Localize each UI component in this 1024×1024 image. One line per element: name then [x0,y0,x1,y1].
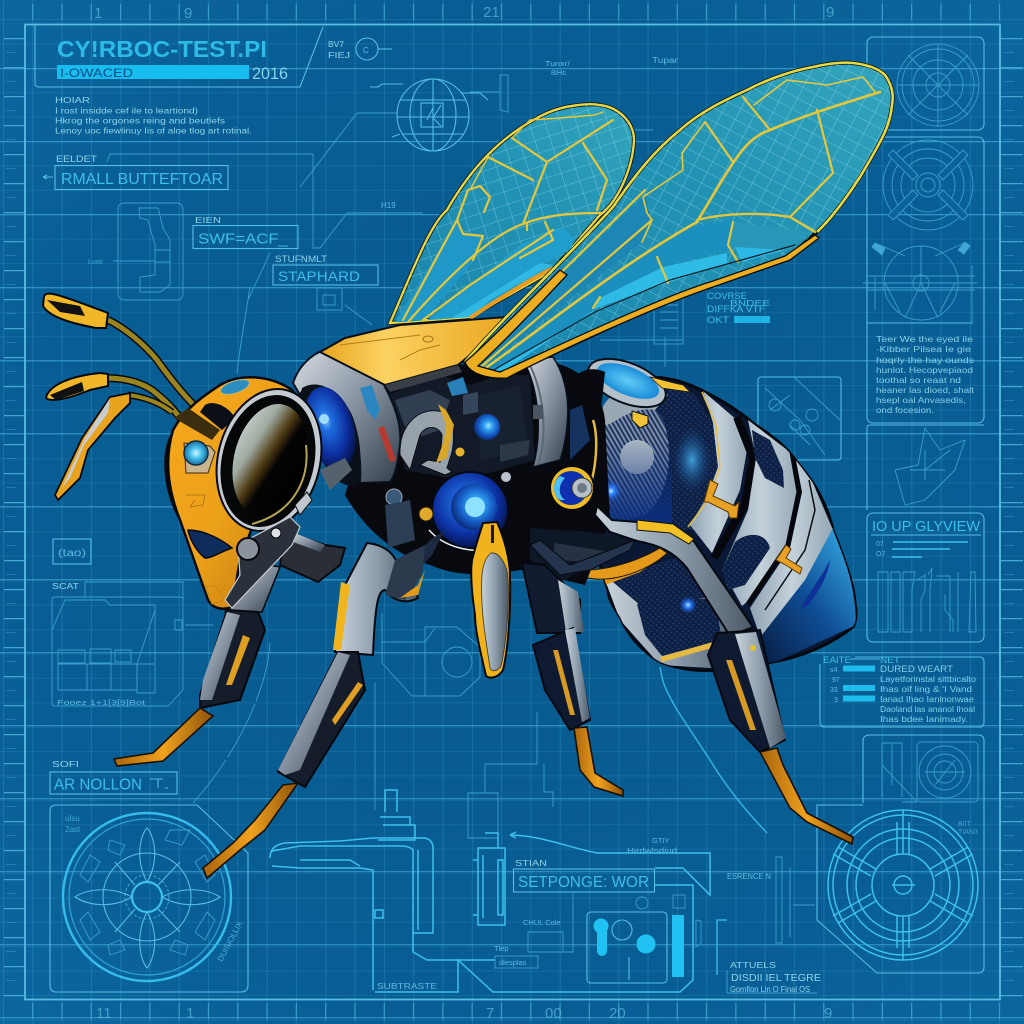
rate bars: 33 [830,687,838,694]
panel note text: toothal so reaat nd [876,375,961,385]
label: air nollon: AR NOLLON [54,776,142,794]
fan rotor diagram: DUISIOLLIX [216,919,245,963]
yellow connector one [704,480,739,518]
covers label and small box: OKT [707,315,729,326]
small blue orb [474,414,500,440]
left foot [114,708,213,766]
right panel: turbine dial [867,37,984,130]
thorax mechanical body [293,317,632,590]
left foreleg lower [200,610,265,708]
rate and note panel [820,655,984,727]
antennae [43,294,220,500]
label: swfacf: EIEN [195,216,221,225]
top labels and dial: C [363,46,369,55]
small tag box: (tao) [58,548,86,559]
lower antenna claw [128,395,172,412]
small turbine schematic [882,742,978,802]
brass bolts and couplers [419,507,433,521]
note text [880,664,977,724]
label: air nollon: SOFI [52,759,79,769]
top labels and dial: 8iHs [551,68,566,77]
label: small butterfoar [43,154,228,190]
centre hexagon schematic [375,613,553,838]
note text: Daoland las ananol Ihoal [880,705,975,714]
intro text block [55,95,252,136]
middle leg [522,563,623,796]
base panels [488,196,650,359]
title panel [35,24,323,87]
panel note text: ond focesion. [876,405,934,415]
panel note text [876,334,975,415]
small device schematic: Lusti [88,259,103,266]
note text: Ianad Ihao Ianinonwae [880,695,975,704]
thin arm [280,532,345,582]
big foot [203,783,298,878]
mouth [188,530,232,558]
ruler numbers [94,4,834,1022]
ruler numbers: 00 [545,1005,562,1022]
silver band three [750,455,833,642]
label: swfacf [193,216,298,248]
jaw mechanism [225,517,300,608]
attributes text and scale: ESRENCE N [727,872,771,881]
small tag box [53,539,91,564]
panel note text: ·Kibber Pilsea Ie gie [876,344,971,354]
top labels and dial [328,38,678,210]
attributes text and scale: ATTUELS [730,960,776,970]
attributes text and scale: DISDII IEL TEGRE [731,973,821,984]
label: staphard: STUFNMLT [275,254,328,264]
bottom right turbine panel [817,735,984,973]
small armour piece [320,458,352,490]
wiring box [758,377,841,460]
bottom left turbine panel: ulsu [65,814,80,823]
ruler numbers: 9 [824,1005,832,1022]
front wing [460,60,900,380]
small device schematic [88,203,183,300]
panel note text: heaner las dioed, shalt [876,385,975,395]
note text: Layetforinstal sittbicalto [880,675,977,684]
face marks [186,495,205,507]
note text: Ihas oif ling & 'I Vand [880,685,972,694]
rear leg [530,506,853,844]
rate bars: 97 [832,677,840,684]
big foreleg lower [278,652,365,787]
label: air nollon [50,759,177,794]
ruler numbers: 1 [94,5,102,22]
rear lower leg [708,630,785,752]
panel note text: hsepl oal Anvasedis, [876,395,966,405]
right panel: fan and specification [863,137,984,423]
bottom right turbine panel: BIIT [958,821,972,828]
machine diagram [863,242,977,322]
antenna sockets [200,403,235,430]
top labels and dial: BV7 [328,39,344,49]
rear wing cyan base cells [395,222,483,322]
pipe and valve labels: SUBTRASTE [377,981,437,991]
ruler numbers: 11 [96,1005,112,1022]
rear wing lower orange edge [470,268,553,318]
rear wing veins [403,112,613,322]
flower icon panel [867,425,984,510]
setup panel: STIAN [515,858,547,868]
setup panel [514,858,701,983]
collar ring [293,349,400,483]
big eye [202,378,336,542]
covers label and small box: COVRSE [707,291,747,302]
yellow connector two [776,545,802,574]
top cap [581,349,690,428]
note text: DURED WEART [880,664,954,674]
pipe and valve labels: GTIY [652,836,670,845]
pipe and valve labels [377,836,677,991]
middle lower leg [533,628,590,730]
ruler numbers: 1 [186,1005,194,1022]
blue tail tip [758,528,856,666]
year: 2016 [252,65,288,83]
globe diagram [370,79,488,151]
intro text block: Hkrog the orgones reing and beutlefs [55,116,225,126]
covers label and small box: BNDEE [730,299,770,308]
fan rotor diagram [63,813,245,981]
front legs [114,532,425,878]
middle antenna [105,378,185,425]
pipe and valve labels: CHUL Cole [523,918,561,927]
label: staphard [273,254,378,285]
pipe and valve labels: dlesplas [499,958,527,967]
rate bars: 3 [834,697,838,704]
middle foot [574,727,623,796]
bottom left turbine panel: 2ast [65,825,81,834]
connector lines upper left [107,113,423,803]
panel note text: Teer We the eyed ile [876,334,973,344]
panel note text: hoqrly the hay ounds [876,355,974,365]
core blue orb [432,472,508,548]
covers label and small box: DIFFKA VTF [707,304,765,315]
attributes text and scale: Gomfion Lin O Final OS [730,984,810,994]
rate and note panel: EAITE [823,655,851,665]
top labels and dial: H19 [381,201,396,210]
orange belly strip [585,548,667,579]
tool overview panel [867,513,984,642]
joint orb [550,466,594,510]
left foreleg upper [225,562,280,612]
label: small butterfoar: RMALL BUTTEFTOAR [61,171,223,188]
ruler numbers: 9 [826,4,834,21]
scat panel: Fooez 1+1[3[9]Bot [57,698,146,707]
rate bars: s4 [830,667,838,674]
rear wing [380,100,640,330]
wing root and lower edge [465,235,819,378]
label: swfacf: SWF=ACF_ [198,230,289,248]
ruler numbers: 7 [486,1005,494,1022]
small icon box [317,288,342,310]
forehead badge [219,377,251,397]
label: small butterfoar: EELDET [56,154,98,164]
top labels and dial: FIEJ [328,50,350,60]
title: CY!RBOC-TEST.PI [57,36,267,62]
pipe and valve labels: Hirdwlsdiud [627,848,677,855]
rear foot [760,748,853,844]
rate bars [830,666,875,704]
top labels and dial: Tupar [652,56,678,65]
pipe schematic [270,667,767,992]
label: staphard: STAPHARD [278,268,360,284]
silver band two [722,420,800,606]
ruler numbers: 21 [483,4,500,21]
bottom left turbine panel [50,805,248,992]
lower dark armour [530,528,632,582]
upper antenna [108,320,220,428]
collar blue orb [296,381,364,475]
side sensor [184,443,215,473]
abdomen [581,349,856,670]
status bar label: I-OWACED [60,66,133,80]
scat panel [52,581,213,707]
title status bar [57,65,249,79]
setup panel: SETPONGE: WOR [518,874,649,891]
hook arm [400,411,454,475]
intro text block: I rost insidde cef ile to leartiond) [55,106,198,116]
ruler numbers: 20 [609,1005,626,1022]
tool overview panel: 07 [876,541,884,548]
fan diagram [883,140,973,230]
scat panel: SCAT [52,581,79,591]
control device [587,895,701,983]
pipe and valve labels: Tlep [494,944,509,953]
striped sphere [605,410,669,520]
intro text block: Lenoy uoc fiewlinuy Iis of aloe tlog art rotinal. [55,126,252,136]
large turbine diagram [828,810,978,960]
bottom right turbine panel: TIAN3 [958,829,978,836]
rear ring [523,357,568,467]
note text: Ihas bdee Ianimady. [880,715,968,724]
tool drawings [878,568,976,632]
intro text block: HOIAR [55,95,90,105]
dark mesh segment [650,389,718,530]
attributes text and scale [727,857,821,994]
lower silver plating [606,580,726,668]
panel note text: hunlot. Hecopvepiaod [876,365,973,375]
front wing veins [470,77,880,372]
silver band one [690,391,747,553]
tool overview panel: O7 [876,551,885,558]
head [166,377,336,609]
big foreleg upper [335,543,418,655]
rate and note panel: NET [880,655,901,665]
yellow top plate [320,317,507,385]
tool overview panel: IO UP GLYVIEW [872,518,981,535]
yellow shield leg [471,522,510,678]
ruler numbers: 9 [184,5,192,22]
top labels and dial: Tunxr/ [545,59,571,68]
covers label and small box [600,291,770,367]
